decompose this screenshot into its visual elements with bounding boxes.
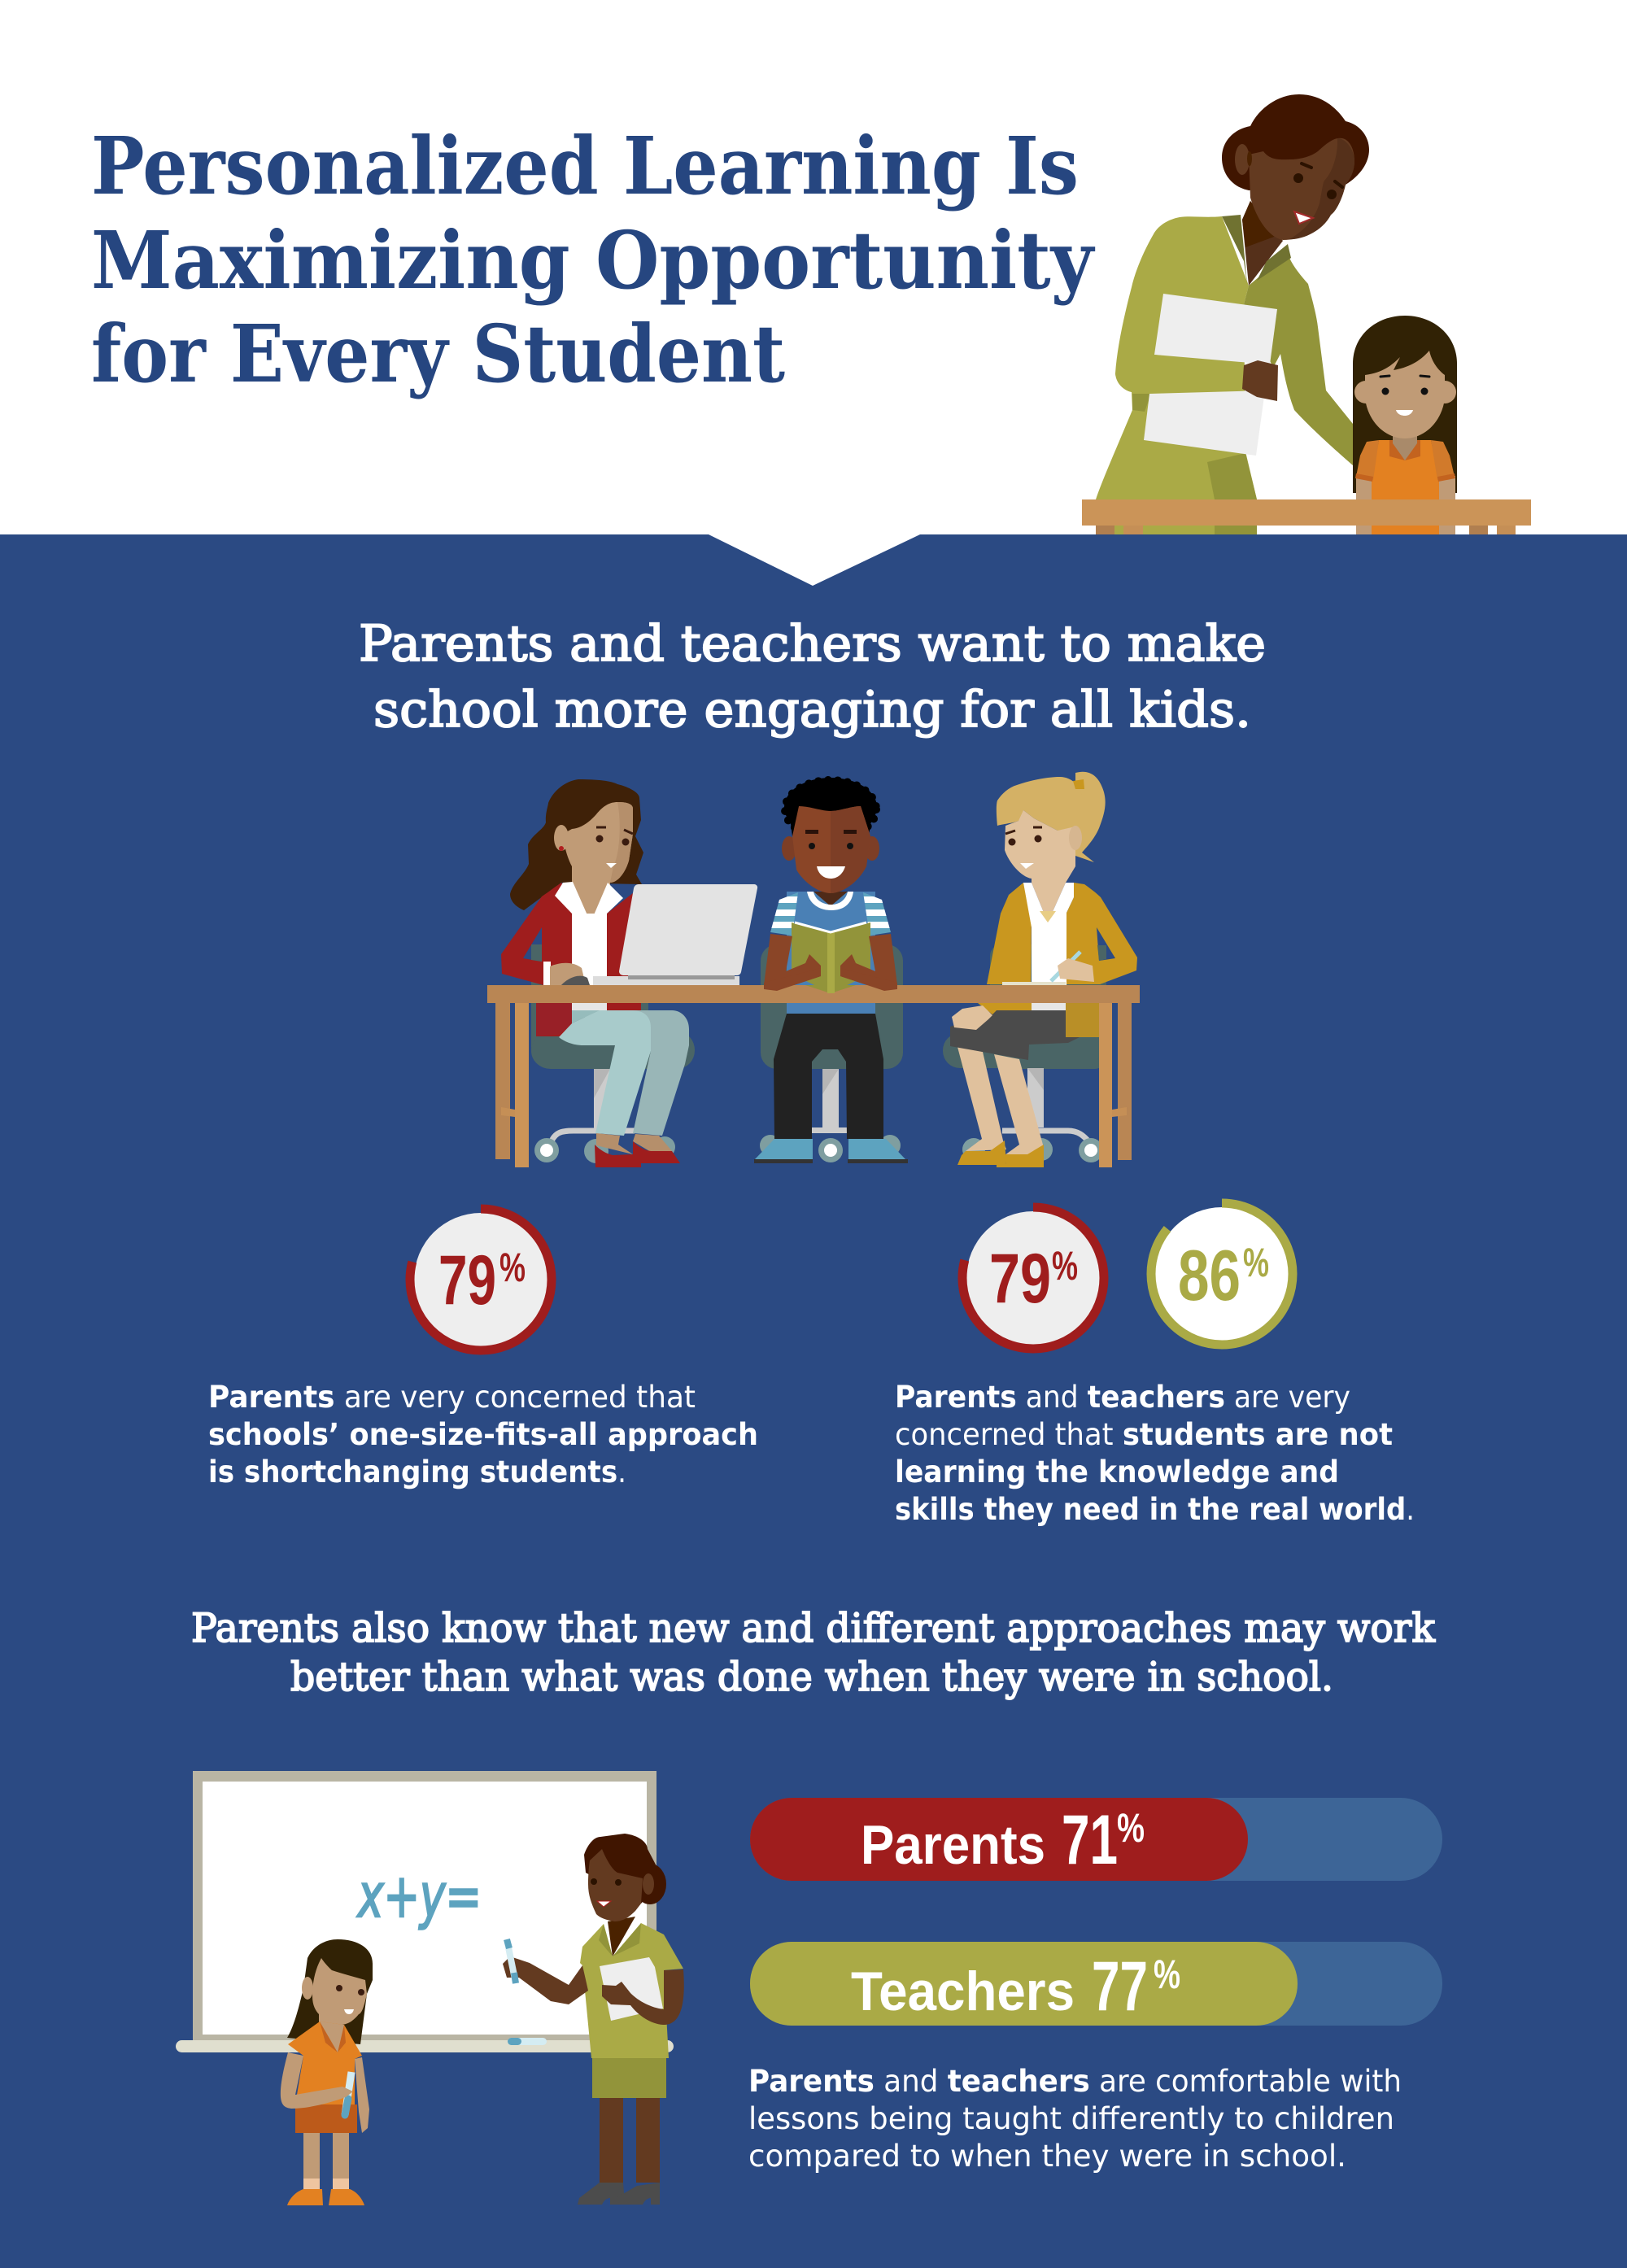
teacher head xyxy=(1222,94,1369,286)
text: one-size-fits-all: schools’ one-size-fits-all approach xyxy=(208,1417,758,1452)
book xyxy=(792,922,870,993)
stat ring: parents 79%: % xyxy=(499,1245,526,1290)
stat ring: parents 79%: 79 xyxy=(438,1241,496,1319)
skirt xyxy=(950,1010,1080,1060)
teacher dress xyxy=(1096,216,1353,534)
student with marker xyxy=(281,1939,373,2205)
bar chart: parents 71%: % xyxy=(1117,1805,1145,1851)
woman with pen xyxy=(950,772,1137,1167)
title: Maximizing Opportunity xyxy=(91,214,1095,307)
laptop xyxy=(593,884,757,985)
text: one-size-fits-all xyxy=(208,1380,758,1489)
pants xyxy=(536,1003,689,1136)
teacher with marker xyxy=(503,1834,684,2205)
student head and body xyxy=(1353,316,1457,534)
illustration: three people at a table xyxy=(487,772,1140,1167)
boy's forearms over table xyxy=(764,968,897,993)
desk xyxy=(1082,499,1531,534)
papers held by teacher xyxy=(1115,294,1278,456)
text: real world skills: skills they need in the real world. xyxy=(895,1492,1415,1527)
boy reading book xyxy=(754,778,908,1163)
title xyxy=(91,120,1095,400)
stat ring: parents 79% xyxy=(410,1209,552,1350)
chairs xyxy=(531,944,1106,1143)
bar chart: parents 71%: 71 xyxy=(1062,1801,1118,1879)
text: real world skills xyxy=(895,1380,1415,1527)
subheading: parents and teachers: school more engaging for all kids. xyxy=(373,681,1251,739)
text: comfortable with lessons: Parents and teachers are comfortable with xyxy=(748,2064,1402,2099)
stat ring: parents 79% second: % xyxy=(1052,1243,1078,1289)
text: one-size-fits-all: Parents are very concerned that xyxy=(208,1380,696,1415)
blouse xyxy=(1023,883,1074,1010)
text: comfortable with lessons: lessons being taught differently to children xyxy=(748,2101,1394,2136)
subheading: new approaches xyxy=(191,1605,1436,1700)
subheading: parents and teachers: Parents and teachers want to make xyxy=(359,615,1266,673)
title: for Every Student xyxy=(91,307,785,400)
whiteboard xyxy=(176,1771,674,2052)
woman with laptop xyxy=(501,779,689,1167)
illustration: teacher and student at a desk xyxy=(1082,94,1531,534)
cardigan xyxy=(978,883,1137,1037)
illustration: whiteboard with teacher and student xyxy=(176,1771,684,2205)
subheading: new approaches: better than what was done when they were in school. xyxy=(290,1654,1333,1700)
stat ring: parents 79% second xyxy=(962,1207,1104,1349)
legs and shoes xyxy=(957,1047,1044,1167)
subheading: parents and teachers xyxy=(359,615,1266,739)
stat ring: teachers 86%: % xyxy=(1243,1240,1269,1285)
blue background panel with notch xyxy=(0,534,1627,2268)
equation: x+y= xyxy=(357,1861,482,1931)
bar chart: teachers 77%: Teachers xyxy=(851,1961,1075,2022)
text: one-size-fits-all: is shortchanging students. xyxy=(208,1455,626,1489)
stat ring: teachers 86% xyxy=(1151,1203,1293,1345)
bar chart: teachers 77% xyxy=(750,1942,1442,2026)
back table legs xyxy=(495,1003,1132,1160)
subheading: new approaches: Parents also know that new and different approaches may work xyxy=(191,1605,1436,1651)
shoes xyxy=(595,1133,680,1167)
text: real world skills: Parents and teachers are very xyxy=(895,1380,1350,1415)
table xyxy=(487,985,1140,1167)
text: real world skills: concerned that students are not xyxy=(895,1417,1393,1452)
bar chart: parents 71%: Parents xyxy=(861,1814,1045,1876)
text: comfortable with lessons: compared to when they were in school. xyxy=(748,2139,1346,2174)
bar chart: parents 71% xyxy=(750,1798,1442,1881)
chair wheels xyxy=(534,1135,1103,1163)
bar chart: teachers 77%: 77 xyxy=(1092,1947,1148,2026)
stat ring: parents 79% second: 79 xyxy=(989,1240,1051,1318)
text: real world skills: learning the knowledge and xyxy=(895,1455,1339,1489)
text: comfortable with lessons xyxy=(748,2064,1402,2174)
title: Personalized Learning Is xyxy=(91,120,1079,212)
bar chart: teachers 77%: % xyxy=(1154,1952,1180,1997)
stat ring: teachers 86%: 86 xyxy=(1178,1235,1241,1315)
